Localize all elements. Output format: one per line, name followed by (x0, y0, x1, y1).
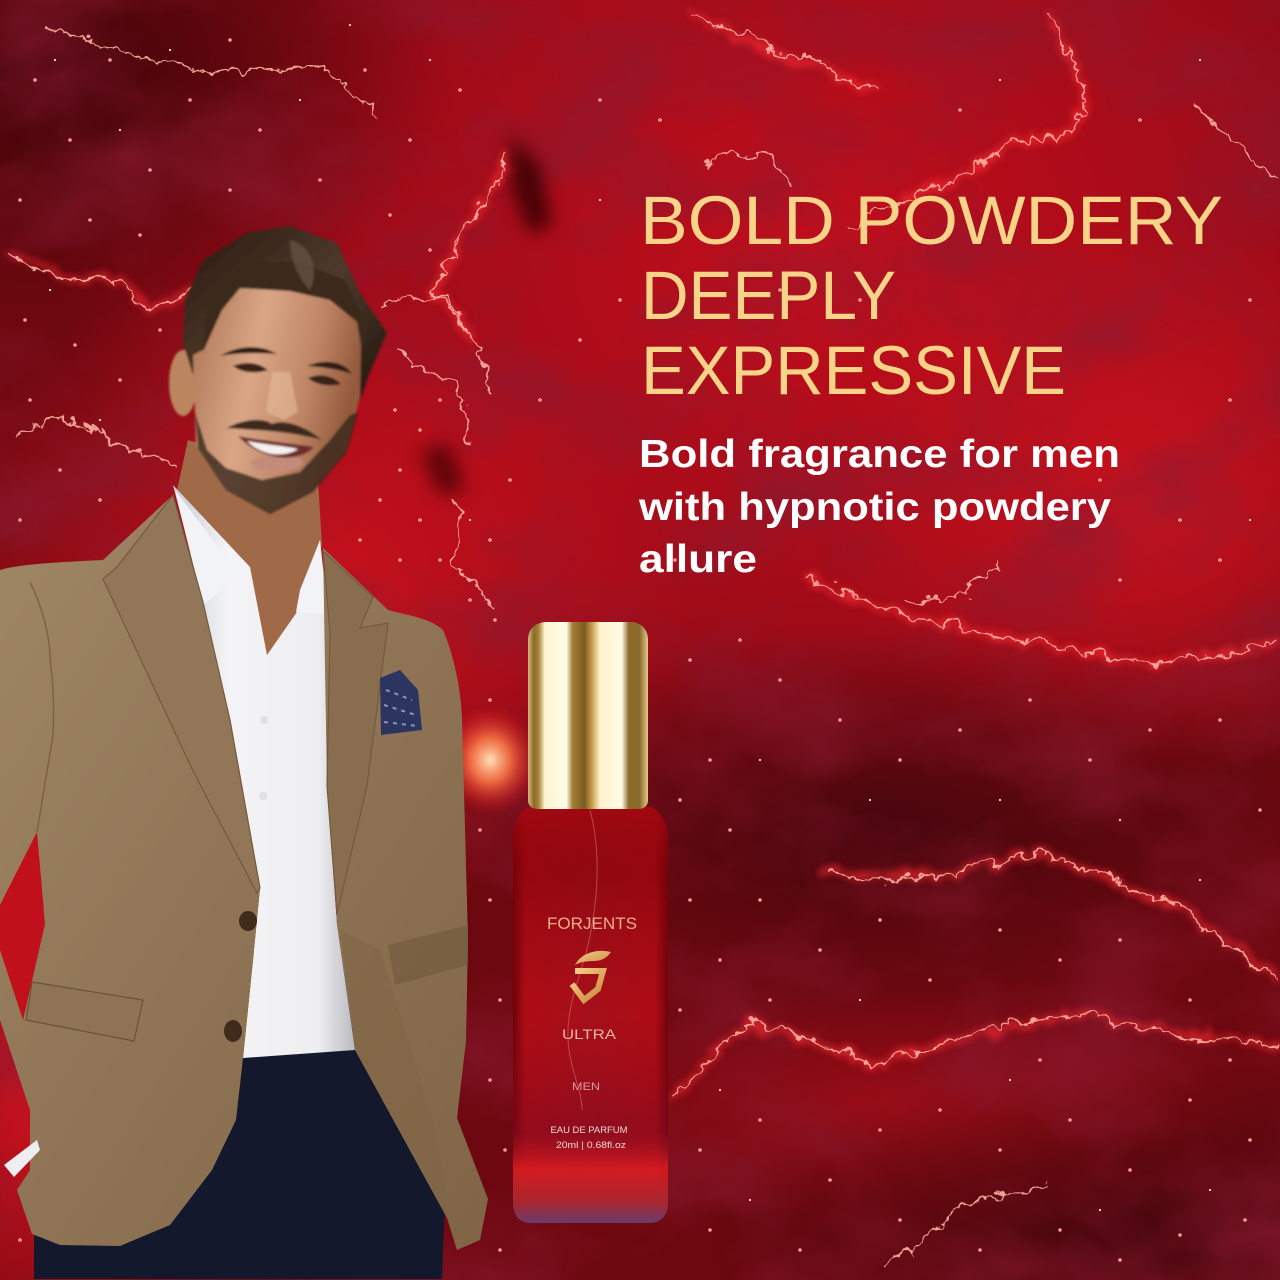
jacket pocket flap (26, 982, 143, 1041)
trousers (34, 1035, 445, 1279)
buttons (239, 911, 257, 931)
hair back (183, 226, 387, 400)
headline (640, 182, 1223, 409)
man in tan blazer (0, 226, 488, 1279)
lapel right (323, 551, 388, 914)
shirt cuff (4, 1140, 40, 1177)
perfume bottle (513, 622, 668, 1223)
head (169, 226, 387, 514)
bottle glass body (513, 807, 668, 1223)
nose (266, 372, 298, 420)
lapel left (103, 495, 260, 893)
moustache (227, 420, 322, 440)
right sleeve fold (388, 925, 468, 985)
hair front (203, 262, 368, 352)
subheading: Bold fragrance for men (639, 433, 1120, 476)
shirt (173, 485, 355, 1058)
bottle label: 20ml | 0.68fl.oz (556, 1140, 626, 1151)
inner tube (568, 810, 597, 1110)
sleeve seam (30, 582, 54, 832)
ear (169, 350, 197, 416)
smile (238, 436, 314, 458)
logo (572, 951, 611, 1000)
subheading: allure (639, 538, 757, 581)
blazer (0, 495, 488, 1250)
neck (176, 440, 322, 655)
subheading: with hypnotic powdery (638, 486, 1111, 529)
eyes and brows (220, 347, 352, 374)
bottle label: FORJENTS (547, 914, 637, 933)
lower lip (251, 455, 303, 471)
gold cap (528, 622, 648, 809)
headline: EXPRESSIVE (641, 332, 1066, 409)
bottle label (547, 914, 637, 1151)
headline: DEEPLY (641, 257, 896, 334)
bottle label: EAU DE PARFUM (550, 1125, 628, 1136)
shirt collar (175, 490, 327, 614)
bottle label: MEN (572, 1081, 600, 1093)
arm gap (0, 832, 45, 1020)
pocket square (380, 670, 422, 735)
shirt buttons (260, 716, 268, 724)
headline: BOLD POWDERY (640, 182, 1223, 259)
subheading (638, 433, 1120, 581)
beard (195, 412, 358, 514)
bottle label: ULTRA (562, 1026, 617, 1042)
face (193, 288, 361, 512)
